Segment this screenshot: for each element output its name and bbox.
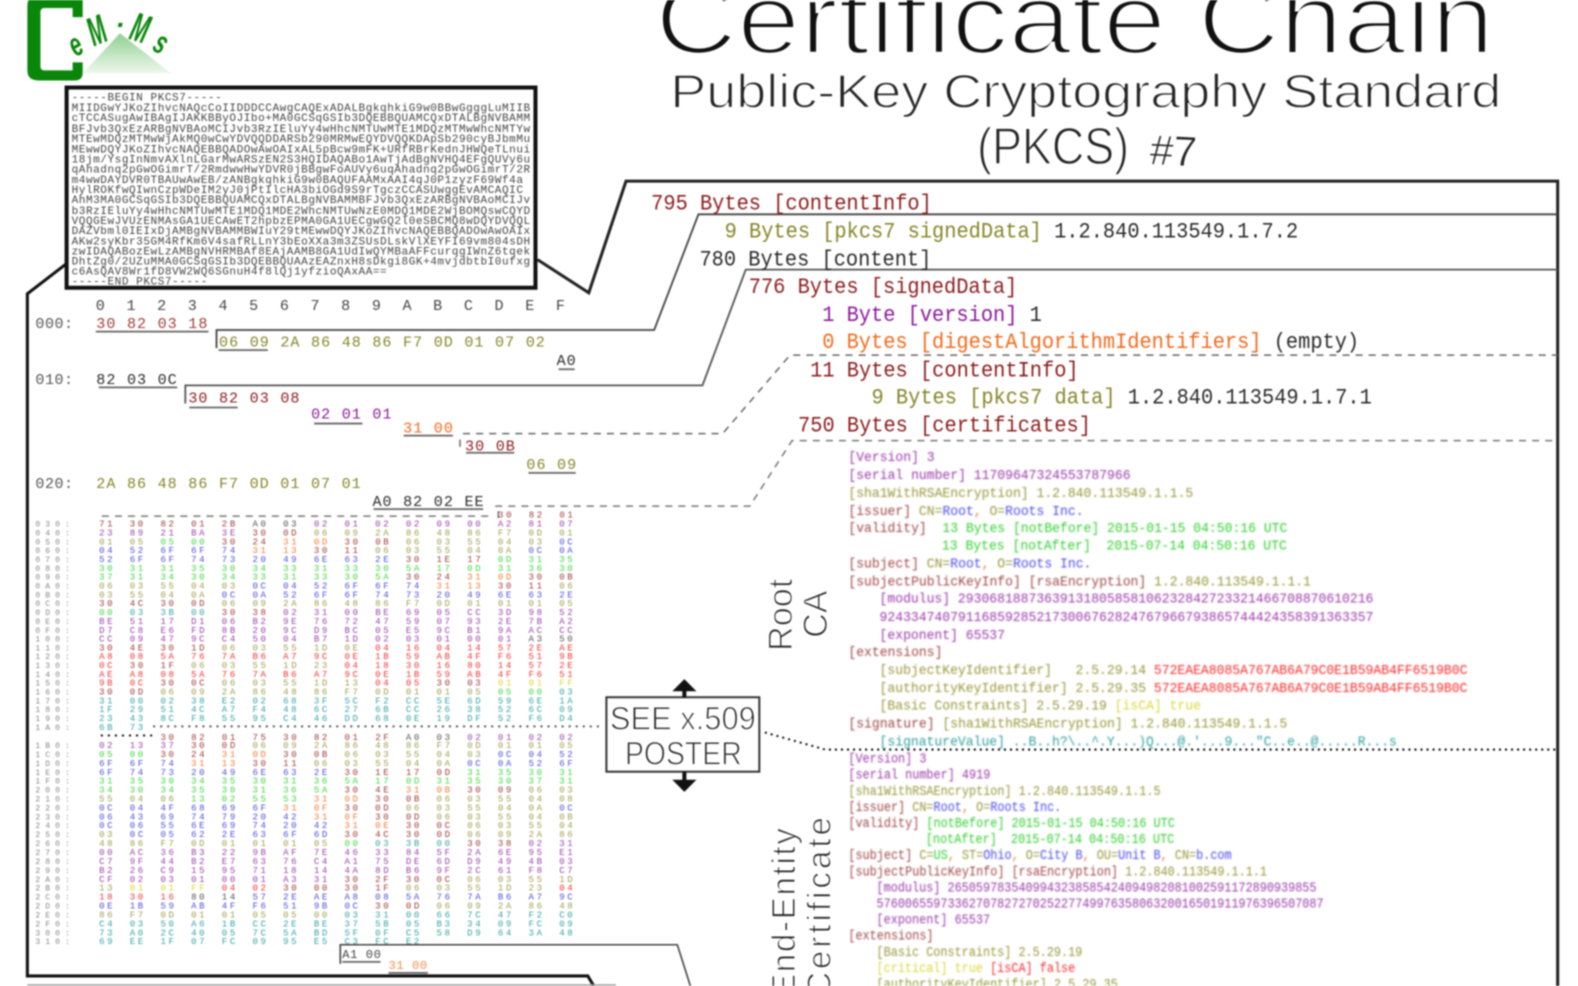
panel: PKCS7 structure outline: 9 Bytes [pkcs7 signedData] 1.2.840.113549.1.7.2 [725, 220, 1298, 245]
arrow: up [672, 679, 696, 697]
panel: End-Entity certificate fields: [validity] [notBefore] 2015-01-15 04:50:16 UTC [848, 815, 1175, 831]
panel: annotated header hex: 020: [35, 475, 74, 493]
panel: Root CA certificate fields: [extensions] [848, 646, 942, 661]
panel: Root CA certificate fields: [Basic Constraints] 2.5.29.19 [isCA] true [880, 699, 1201, 714]
logo: CemMs: e [61, 26, 89, 63]
panel: PKCS7 structure outline [651, 192, 1372, 439]
panel: hex dump, end-entity certificate: 55 04 06 13 02 55 53 31 0D 30 0B 06 03 55 04 08 [99, 794, 575, 805]
panel: hex dump, root certificate: 0C 30 1F 06 03 55 1D 23 04 18 30 16 80 14 57 2E [99, 660, 575, 671]
panel: hex dump, root certificate: 23 89 21 BA 3E 30 0D 06 09 2A 86 48 86 F7 0D 01 [99, 528, 575, 539]
panel: Root CA certificate fields: [Version] 3 [848, 450, 935, 466]
panel: PEM block: HylROKfwQIwnCzpWDeIM2yJ0jPtIlcHA3biOGd9S9rTgczCCASUwggEvAMCAQIC [72, 185, 524, 197]
panel: PEM block: MTEwMDQzMTMwWjAkMQ0wCwYDVQQDDARSb290MRMwEQYDVQQKDApSb290cyBJbmMu [72, 134, 531, 146]
panel: hex dump, end-entity certificate: 0C 04 4F 68 69 6F 31 0F 30 0D 06 03 55 04 0A 0C [99, 802, 575, 813]
panel: PKCS7 structure outline: 11 Bytes [contentInfo] [810, 359, 1079, 384]
label: Root CA: Root [762, 578, 800, 651]
title: #7 [1149, 126, 1198, 175]
panel: hex dump, root certificate: 080: [35, 565, 75, 574]
panel: End-Entity certificate fields: [extensions] [848, 928, 934, 944]
panel: hex dump, root certificate: 0C0: [35, 600, 75, 609]
panel: hex dump, end-entity certificate: 00 AC 36 B3 22 9B AF 7E 46 33 84 5F 2A 6E 95 E1 [99, 847, 575, 858]
frame and connector lines [27, 181, 1558, 986]
panel: hex dump, root certificate: 0A0: [35, 583, 75, 592]
panel: hex dump, root certificate: BE 51 17 D1 06 B2 9E 76 72 47 59 07 93 2E 7B A2 [99, 616, 575, 627]
panel: hex dump, root certificate: 37 31 34 30 34 33 31 33 30 5A 30 24 31 0D 30 0B [99, 572, 575, 583]
panel: End-Entity certificate fields: 576006559733627078272702522774997635806320016501911976396507087 [877, 896, 1324, 912]
panel: hex dump, end-entity certificate: 280: [35, 858, 75, 867]
panel: PEM block: qAhadnq2pGwOGimrT/2RmdwwHwYDVR0jBBgwFoAUVy6uqAhadnq2pGwOGimrT/2R [72, 165, 531, 177]
panel: hex dump, root certificate: 31 00 02 38 E2 02 68 3F 5C F2 CC 5E 6D 59 6E 1A [99, 695, 575, 706]
panel: hex dump, end-entity certificate: 2D0: [35, 903, 75, 912]
panel: annotated header hex: A0 [557, 352, 577, 370]
panel: hex dump, end-entity certificate: 34 30 34 35 30 31 36 5A 30 4E 31 0B 30 09 06 03 [99, 785, 575, 796]
panel: PKCS7 structure outline: 776 Bytes [signedData] [749, 275, 1017, 300]
panel: hex dump, root certificate: 01 05 05 00 30 24 31 0D 30 0B 06 03 55 04 03 0C [99, 536, 575, 547]
panel: hex dump, end-entity certificate: 260: [35, 840, 75, 849]
panel: End-Entity certificate fields: [modulus] 2650597835409943238585424094982081002591172890939855 [877, 880, 1317, 896]
panel: hex dump, root certificate [35, 510, 575, 733]
panel: hex dump, root certificate: 6B 73 [99, 722, 146, 733]
panel: hex dump, end-entity certificate: 06 43 69 74 79 20 42 31 0F 30 0D 06 03 55 04 0B [99, 811, 575, 822]
panel: PEM block: b3RzIEluYy4wHhcNMTUwMTE1MDQ1MDE2WhcNMTUwNzE0MDQ1MDE2WjBOMQswCQYD [72, 206, 531, 218]
trailing hex bytes [342, 948, 428, 973]
logo: CemMs: · [115, 8, 125, 40]
panel: PEM block: 18jm/YsgInNmvAXlnLGarMwARSzEN2S3HQIDAQABo1AwTjAdBgNVHQ4EFgQUVy6u [72, 154, 531, 166]
panel: hex dump, root certificate: 1A0: [35, 724, 75, 733]
panel: annotated header hex: 02 01 01 [311, 406, 393, 424]
panel: Root CA certificate fields: [subjectKeyIdentifier] 2.5.29.14 572EAEA8085A767AB6A79C0E1B59AB4FF6519B0C [880, 664, 1467, 679]
panel: annotated header hex: 30 82 03 08 [188, 389, 300, 407]
panel: End-Entity certificate fields: [Version] 3 [848, 751, 926, 767]
panel: hex dump, end-entity certificate: B2 26 C9 15 95 71 18 14 4A 8D B6 9F 2C 61 F8 C7 [99, 865, 575, 876]
panel: PEM block: -----BEGIN PKCS7----- [72, 93, 222, 105]
panel: hex dump, end-entity certificate: 31 35 30 34 35 30 31 36 5A 17 0D 31 35 30 37 31 [99, 776, 575, 787]
panel: hex dump, end-entity certificate: 2C0: [35, 894, 75, 903]
panel: hex dump, root certificate: 0B0: [35, 591, 75, 600]
panel: hex dump, root certificate: 130: [35, 662, 75, 671]
logo: CemMs: M [125, 4, 156, 53]
panel: annotated header hex: 30 82 03 18 [96, 315, 208, 333]
panel: hex dump, root certificate: 090: [35, 574, 75, 583]
panel: hex dump, end-entity certificate: 250: [35, 831, 75, 840]
callout: see x.509 poster: POSTER [625, 736, 742, 772]
logo: CemMs: M [80, 6, 114, 55]
panel: hex dump, end-entity certificate: 2A0: [35, 876, 75, 885]
panel: End-Entity certificate fields: [sha1WithRSAEncryption] 1.2.840.113549.1.1.5 [848, 783, 1161, 799]
panel: hex dump, end-entity certificate: 69 EE 1F 07 FC 09 95 E5 C3 FC E2 [99, 936, 422, 947]
panel: PKCS7 structure outline: 750 Bytes [certificates] [798, 414, 1091, 439]
panel: PKCS7 structure outline: 1 Byte [version] 1 [822, 303, 1042, 328]
panel: hex dump, root certificate: 160: [35, 689, 75, 698]
logo: CemMs: s [148, 23, 175, 61]
panel: hex dump, end-entity certificate: 30 82 01 75 30 82 01 2F A0 03 02 01 02 02 [160, 732, 575, 743]
panel: hex dump, root certificate: 30 4C 30 0D 06 09 2A 86 48 86 F7 0D 01 01 01 05 [99, 598, 575, 609]
panel: hex dump, end-entity certificate: 48 86 F7 0D 01 01 01 05 00 03 3B 00 30 38 02 31 [99, 838, 575, 849]
panel: hex dump, end-entity certificate: 1C0: [35, 751, 75, 760]
panel: PEM block: MIIDGwYJKoZIhvcNAQcCoIIDDDCCAwgCAQExADALBgkqhkiG9w0BBwGgggLuMIIB [72, 103, 531, 115]
panel: hex dump, root certificate: 0E0: [35, 618, 75, 627]
panel: PEM block [67, 88, 535, 289]
panel: End-Entity certificate fields: [exponent] 65537 [877, 912, 990, 928]
panel: hex dump, end-entity certificate: 0C 06 55 6E 69 74 20 42 31 0E 30 0C 06 03 55 04 [99, 820, 575, 831]
panel: hex dump, root certificate: 180: [35, 706, 75, 715]
panel: End-Entity certificate fields: [subject] C=US, ST=Ohio, O=City B, OU=Unit B, CN=b.com [848, 847, 1232, 864]
panel: PEM block: -----END PKCS7----- [72, 277, 208, 289]
panel: hex dump, root certificate: 52 6F 6F 74 73 20 49 6E 63 2E 30 1E 17 0D 31 35 [99, 554, 575, 565]
panel: PEM block: m4wwDAYDVR0TBAUwAwEB/zANBgkqhkiG9w0BAQUFAAMxAAI4qJ0P1zyzF69Wf4a [72, 175, 524, 187]
panel: Root CA certificate fields: [issuer] CN=Root, O=Roots Inc. [848, 505, 1084, 520]
panel: hex dump, end-entity certificate: 2B0: [35, 885, 75, 894]
title: (PKCS) [977, 118, 1129, 176]
panel: End-Entity certificate fields: [critical] true [isCA] false [877, 960, 1075, 976]
panel: annotated header hex: A0 82 02 EE [372, 493, 485, 511]
callout: see x.509 poster: SEE x.509 [610, 700, 756, 736]
panel: hex dump, root certificate: 9B 0C 30 0C 06 03 55 1D 13 04 05 30 03 01 01 FF [99, 678, 575, 689]
panel: hex dump, end-entity certificate: 05 00 30 24 31 0D 30 0B 06 03 55 04 03 0C 04 52 [99, 749, 575, 760]
panel: hex dump, root certificate: 050: [35, 538, 75, 547]
panel: hex dump, end-entity certificate: 03 0C 05 62 2E 63 6F 6D 30 4C 30 0D 06 09 2A 86 [99, 829, 575, 840]
panel: annotated header hex: 000: [35, 315, 74, 333]
panel: Root CA certificate fields [848, 450, 1467, 751]
panel: hex dump, root certificate: 0D0: [35, 609, 75, 618]
title [655, 0, 1501, 176]
panel: PEM block: cTCCASugAwIBAgIJAKKBByOJIbo+MA0GCSqGSIb3DQEBBQUAMCQxDTALBgNVBAMM [72, 113, 531, 125]
panel: Root CA certificate fields: [subject] CN=Root, O=Roots Inc. [848, 557, 1091, 573]
trailing hex bytes: 31 00 [389, 959, 428, 973]
panel: hex dump, root certificate: 71 30 82 01 2B A0 03 02 01 02 02 09 00 A2 81 07 [99, 519, 575, 530]
panel: hex dump, root certificate: 0F0: [35, 627, 75, 636]
panel: PKCS7 structure outline: 9 Bytes [pkcs7 data] 1.2.840.113549.1.7.1 [872, 386, 1372, 411]
panel: hex dump, root certificate: 190: [35, 715, 75, 724]
panel: hex dump, root certificate: A8 08 5A 76 7A B6 A7 9C 0E 1B 59 AB 4F F6 51 9B [99, 651, 575, 662]
panel: Root CA certificate fields: [authorityKeyIdentifier] 2.5.29.35 572EAEA8085A767AB6A79C0E1B59AB4FF6519B0C [880, 682, 1467, 697]
panel: PEM block: MEwwDQYJKoZIhvcNAQEBBQADOwAwOAIxAL5pBcw9mFK+URfRBrKednJHWQeTLnui [72, 144, 531, 156]
panel: hex dump, root certificate: 30 31 31 35 30 34 33 31 33 30 5A 17 0D 31 36 30 [99, 563, 575, 574]
panel: hex dump, end-entity certificate: 02 13 37 30 0D 06 09 2A 86 48 86 F7 0D 01 01 05 [99, 740, 575, 751]
panel: hex dump, root certificate: 03 55 04 0A 0C 0A 52 6F 6F 74 73 20 49 6E 63 2E [99, 589, 575, 600]
panel: hex dump, root certificate: 060: [35, 547, 75, 556]
panel: hex dump, end-entity certificate: 310: [35, 938, 75, 947]
panel: hex dump, root certificate: 04 52 6F 6F 74 31 13 30 11 06 03 55 04 0A 0C 0A [99, 545, 575, 556]
panel: hex dump, root certificate: 110: [35, 644, 75, 653]
subtitle: Public-Key Cryptography Standard [670, 66, 1501, 119]
panel: PEM block: BFJvb3QxEzARBgNVBAoMCIJvb3RzIEluYy4wHhcNMTUwMTE1MDQzMTMwWhcNMTYw [72, 124, 531, 136]
panel: hex dump, root certificate: 1F 29 51 4C A7 F4 48 6C 27 6B CC 26 38 52 6C 09 [99, 704, 575, 715]
panel: hex dump, root certificate: 00 03 3B 00 30 38 02 31 00 BE 69 05 CC 3D 98 52 [99, 607, 575, 618]
panel: hex dump, end-entity certificate: 2E0: [35, 911, 75, 920]
panel: PEM block: DhtZg0/2UZuMMA0GCSqGSIb3DQEBBQUAAzEAZnxH8sDkgi8GK+4mvjdbtbI0ufxg [72, 257, 531, 269]
callout: see x.509 poster [606, 679, 759, 792]
panel: annotated header hex: 31 00 [403, 420, 454, 438]
panel: PEM block: DAZVbml0IEIxDjAMBgNVBAMMBWIuY29tMEwwDQYJKoZIhvcNAQEBBQADOwAwOAIx [72, 226, 531, 238]
panel: End-Entity certificate fields: [notAfter] 2015-07-14 04:50:16 UTC [926, 831, 1174, 847]
panel: hex dump, root certificate: CC 09 47 9C C4 50 04 B7 1D 02 03 01 00 01 A3 50 [99, 634, 575, 645]
panel: hex dump, end-entity certificate: 290: [35, 867, 75, 876]
label: End-Entity Certificate [766, 817, 838, 986]
panel: annotated header hex: 06 09 [526, 456, 577, 474]
arrow: down [672, 772, 696, 792]
panel: hex dump, end-entity certificate: CF 02 03 01 00 01 A3 31 30 2F 30 0C 06 03 55 1D [99, 874, 575, 885]
panel: hex dump, root certificate: 30 4E 30 1D 06 03 55 1D 0E 04 16 04 14 57 2E AE [99, 642, 575, 653]
panel: annotated header hex: 06 09 2A 86 48 86 F7 0D 01 07 02 [219, 334, 546, 352]
panel: hex dump, root certificate: 23 43 8C F8 55 95 C4 46 DD 68 0E 19 DF 52 F6 D4 [99, 713, 575, 724]
panel: hex dump, end-entity certificate: 18 30 16 80 14 57 2E AE A8 08 5A 76 7A B6 A7 9C [99, 892, 575, 903]
panel: Root CA certificate fields: 13 Bytes [notAfter] 2015-07-14 04:50:16 UTC [942, 539, 1287, 555]
panel: annotated header hex: 30 0B [465, 438, 516, 456]
panel: hex dump, end-entity certificate: 2F0: [35, 920, 75, 929]
panel: hex dump, root certificate: AE A8 08 5A 76 7A B6 A7 9C 0E 1B 59 AB 4F F6 51 [99, 669, 575, 680]
panel: hex dump, end-entity certificate: 1D0: [35, 760, 75, 769]
panel: Root CA certificate fields: [validity] 13 Bytes [notBefore] 2015-01-15 04:50:16 UTC [848, 522, 1287, 537]
panel: hex dump, end-entity certificate: 1F0: [35, 778, 75, 787]
panel: hex dump, end-entity certificate: 300: [35, 929, 75, 938]
panel: Root CA certificate fields: [subjectPublicKeyInfo] [rsaEncryption] 1.2.840.113549.1.1.1 [848, 575, 1311, 591]
label: Root CA [762, 578, 835, 651]
panel: hex dump, root certificate: 30 0D 06 09 2A 86 48 86 F7 0D 01 01 05 05 00 03 [99, 687, 575, 698]
panel: PEM block: c6AsQAV8Wr1fD8VW2WQ6SGnuH4f8lQj1yfzioQAxAA== [72, 267, 387, 279]
panel: hex dump, end-entity certificate: 73 A0 2C 40 05 7C 5A BD 5F 0F C5 58 D9 64 3A 48 [99, 927, 575, 938]
panel: annotated header hex: 010: [35, 371, 74, 389]
panel: End-Entity certificate fields: [issuer] CN=Root, O=Roots Inc. [848, 799, 1061, 815]
panel: PEM block: zwIDAQABozEwLzAMBgNVHRMBAf8EAjAAMB8GA1UdIwQYMBaAFFcurqgIWnZ6tqek [72, 247, 531, 259]
panel: annotated header hex: 2A 86 48 86 F7 0D 01 07 01 [96, 475, 362, 493]
panel: End-Entity certificate fields: [Basic Constraints] 2.5.29.19 [877, 944, 1082, 960]
panel: hex dump, root certificate: 070: [35, 556, 75, 565]
panel: hex dump, root certificate: 100: [35, 636, 75, 645]
panel: Root CA certificate fields: [signatureValue] ..B..h?\..^.Y...)Q...@.'...9..."C..e..@.....R...s [880, 735, 1397, 751]
panel: hex dump, root certificate: 140: [35, 671, 75, 680]
panel: PEM block: VQQGEwJVUzENMAsGA1UECAwET2hpbzEPMA0GA1UECgwGQ2l0eSBCMQ8wDQYDVQQL [72, 216, 531, 228]
panel: Root CA certificate fields: [modulus] 29306818873639131805858106232842723321466708870610216 [880, 592, 1373, 608]
panel: hex dump, end-entity certificate: 6F 6F 74 31 13 30 11 06 03 55 04 0A 0C 0A 52 6F [99, 758, 575, 769]
panel: PEM block: AhM3MA0GCSqGSIb3DQEBBQUAMCQxDTALBgNVBAMMBFJvb3QxEzARBgNVBAoMCIJv [72, 195, 531, 207]
panel: hex dump, root certificate: 120: [35, 653, 75, 662]
panel: annotated header hex [35, 297, 577, 511]
panel: Root CA certificate fields: [signature] [sha1WithRSAEncryption] 1.2.840.113549.1.1.5 [848, 717, 1287, 733]
panel: hex dump, end-entity certificate: C7 9F 44 B2 E7 63 76 C4 A1 75 DE 6D D9 49 4B 03 [99, 856, 575, 867]
panel: hex dump, end-entity certificate: 220: [35, 804, 75, 813]
panel: hex dump, root certificate: 06 03 55 04 03 0C 04 52 6F 6F 74 31 13 30 11 06 [99, 581, 575, 592]
panel: End-Entity certificate fields: [subjectPublicKeyInfo] [rsaEncryption] 1.2.840.113549.1.1.1 [848, 863, 1267, 880]
label: Root CA: CA [797, 590, 835, 638]
panel: PKCS7 structure outline: 795 Bytes [contentInfo] [651, 192, 932, 217]
panel: hex dump, root certificate: 030: [35, 521, 75, 530]
panel: End-Entity certificate fields: [serial number] 4919 [848, 767, 990, 783]
panel: Root CA certificate fields: [exponent] 65537 [880, 629, 1005, 644]
logo: CemMs [27, 0, 175, 80]
panel: PKCS7 structure outline: 780 Bytes [content] [699, 248, 931, 273]
panel: hex dump, end-entity certificate: 1E0: [35, 769, 75, 778]
panel: hex dump, end-entity certificate: 270: [35, 849, 75, 858]
panel: hex dump, end-entity certificate: 13 01 01 FF 04 02 30 00 30 1F 06 03 55 1D 23 04 [99, 883, 575, 894]
panel: PKCS7 structure outline: 0 Bytes [digestAlgorithmIdentifiers] (empty) [822, 330, 1359, 355]
panel: annotated header hex: 0 1 2 3 4 5 6 7 8 9 A B C D E F [96, 297, 566, 315]
panel: Root CA certificate fields: [sha1WithRSAEncryption] 1.2.840.113549.1.1.5 [848, 487, 1193, 502]
panel: hex dump, root certificate: 150: [35, 680, 75, 689]
panel: hex dump, root certificate: D7 C8 E6 FD 8B 20 9C D9 BC 05 E5 9C B1 9A AC CC [99, 625, 575, 636]
panel: hex dump, end-entity certificate: 0E 1B 59 AB 4F F6 51 9B 0C 30 0D 06 09 2A 86 48 [99, 901, 575, 912]
panel: End-Entity certificate fields [848, 751, 1324, 986]
panel: hex dump, end-entity certificate: 230: [35, 813, 75, 822]
panel: hex dump, end-entity certificate [35, 732, 575, 947]
panel: annotated header hex: 82 03 0C [96, 371, 178, 389]
panel: hex dump, end-entity certificate: 240: [35, 822, 75, 831]
panel: PEM block: AKw2syKbr35GM4RfKm6V4safRLLnY3bEoXXa3m3ZSUsDLskVlXEYFI69vm804sDH [72, 236, 531, 248]
panel: Root CA certificate fields: [serial number] 11709647324553787966 [848, 469, 1131, 484]
panel: Root CA certificate fields: 924334740791168592852173006762824767966793865744424358391363357 [880, 610, 1373, 626]
panel: hex dump, end-entity certificate: 6F 74 73 20 49 6E 63 2E 30 1E 17 0D 31 35 30 31 [99, 767, 575, 778]
panel: hex dump, end-entity certificate: 86 F7 0D 01 01 05 05 00 03 31 00 66 7C 47 F2 C0 [99, 909, 575, 920]
panel: hex dump, end-entity certificate: C4 03 50 A6 1B CC 2E BE 37 5B 05 B3 34 09 FC 09 [99, 918, 575, 929]
panel: hex dump, root certificate: 040: [35, 530, 75, 539]
trailing hex bytes: A1 00 [342, 948, 382, 962]
panel: hex dump, root certificate: 170: [35, 697, 75, 706]
panel: hex dump, end-entity certificate: 200: [35, 787, 75, 796]
panel: hex dump, end-entity certificate: 210: [35, 796, 75, 805]
panel: hex dump, end-entity certificate: 1B0: [35, 742, 75, 751]
panel: hex dump, root certificate: 30 82 01 [498, 510, 575, 521]
